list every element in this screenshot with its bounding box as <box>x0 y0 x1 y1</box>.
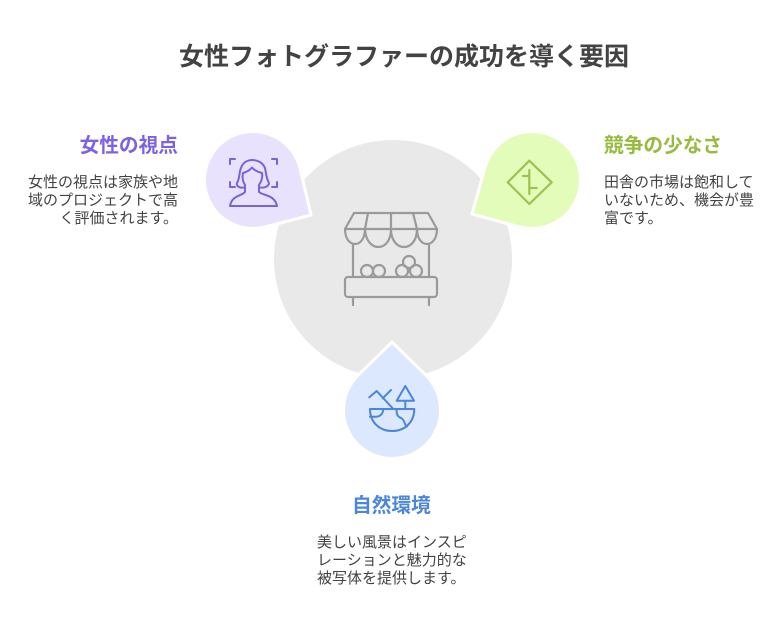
heading: women's perspective: 女性の視点 <box>80 135 178 157</box>
text: low competition: 田舎の市場は飽和して <box>604 174 754 190</box>
text: women's perspective: 女性の視点は家族や地 <box>28 174 178 190</box>
icon: road sign <box>508 161 552 204</box>
heading: low competition: 競争の少なさ <box>604 135 722 157</box>
green drop <box>472 132 580 229</box>
text: natural environment: レーションと魅力的な <box>317 552 467 568</box>
central gray circle <box>274 140 512 378</box>
icon: woman portrait <box>230 159 277 206</box>
text: women's perspective: 域のプロジェクトで高 <box>28 192 178 208</box>
icon: landscape <box>369 386 414 431</box>
heading: natural environment: 自然環境 <box>352 495 431 517</box>
text: low competition: 富です。 <box>604 210 663 226</box>
text: women's perspective <box>28 174 178 226</box>
text: natural environment: 美しい風景はインスピ <box>317 534 467 550</box>
text: natural environment <box>317 534 467 586</box>
blue drop <box>343 342 440 458</box>
text: low competition: いないため、機会が豊 <box>604 192 754 208</box>
title: 女性フォトグラファーの成功を導く要因 <box>179 43 629 71</box>
text: natural environment: 被写体を提供します。 <box>317 570 466 586</box>
text: women's perspective: く評価されます。 <box>59 210 178 226</box>
icon: market stall <box>345 213 437 305</box>
purple drop <box>204 131 311 228</box>
text: low competition <box>604 174 754 226</box>
